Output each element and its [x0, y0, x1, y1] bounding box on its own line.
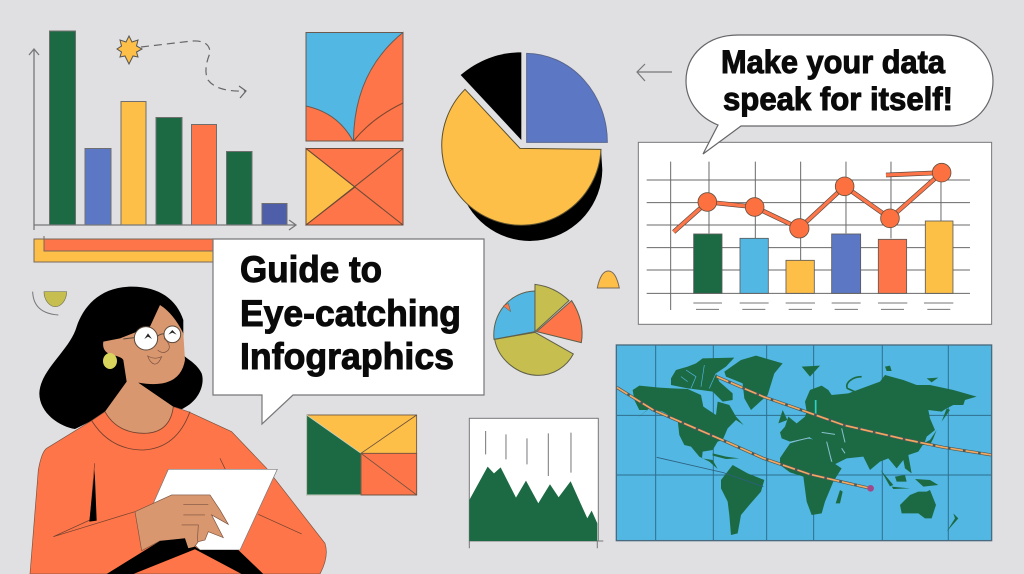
- tablet: [153, 469, 277, 550]
- pie chart: small: [494, 284, 582, 375]
- hand: [135, 495, 228, 551]
- title text: Guide to: [240, 249, 382, 290]
- speech bubble: data: [686, 35, 993, 154]
- sleeve detail: [53, 458, 302, 537]
- speech bubble: title: [213, 239, 484, 424]
- panel: geometric rectangle: [307, 415, 417, 495]
- panel: combo line and bar chart: [638, 142, 992, 324]
- character: woman with tablet: [30, 287, 326, 574]
- black strap: [107, 538, 263, 574]
- bubble text: speak for itself!: [723, 81, 953, 117]
- sweater: [30, 407, 326, 574]
- continents: Eurasia, Africa, Oceania: [778, 366, 977, 532]
- panel: crossed square: [306, 148, 403, 225]
- earring: [103, 353, 117, 369]
- title text: [240, 249, 461, 377]
- map ocean and grid: [616, 345, 992, 541]
- icon: yellow bell: [597, 271, 619, 288]
- panel: area chart: [469, 418, 603, 548]
- bubble text: [721, 44, 953, 117]
- hair: [39, 287, 203, 429]
- bubble text: Make your data: [721, 44, 945, 80]
- panel: arcs square: [306, 32, 403, 141]
- icon: star with dashed arrow: [117, 36, 246, 98]
- panel: world map: [616, 345, 992, 541]
- decorative bars behind title: [34, 236, 216, 262]
- hair under chin: [138, 370, 190, 408]
- continents: Americas and Greenland: [633, 356, 783, 535]
- icon: olive semicircle with arc: [33, 292, 67, 315]
- flight routes: [616, 345, 992, 541]
- arrow: left: [637, 64, 672, 81]
- bar chart: main: [29, 31, 296, 230]
- title text: Infographics: [240, 336, 454, 377]
- face and neck: [103, 305, 185, 433]
- sweater collar: [92, 407, 190, 450]
- glasses: [123, 326, 181, 350]
- pie chart: large: [442, 52, 607, 241]
- nose and smile: [148, 338, 169, 364]
- title text: Eye-catching: [240, 293, 461, 334]
